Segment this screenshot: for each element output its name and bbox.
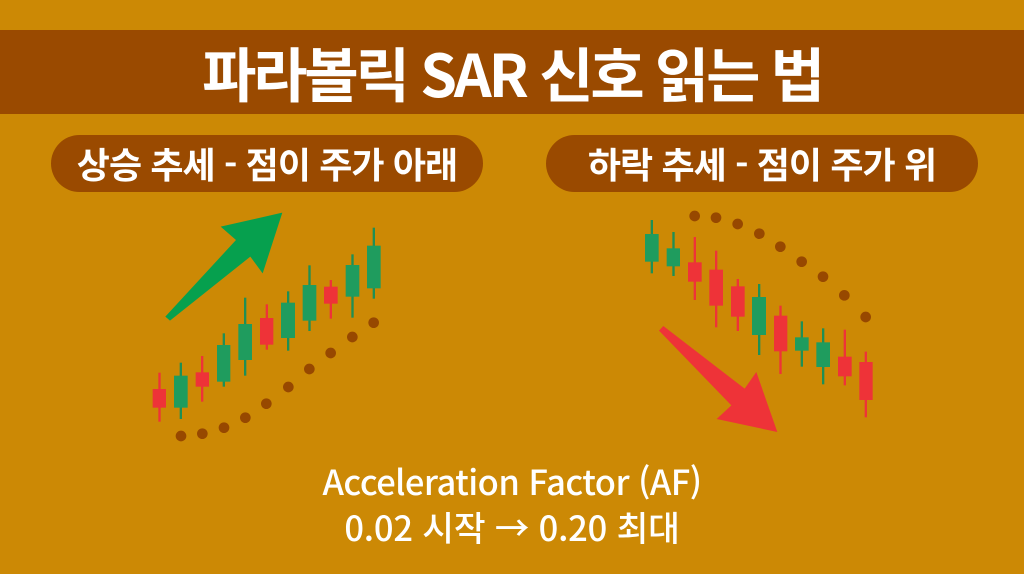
candlesticks: uptrend: [153, 228, 381, 422]
arrow: red down: [659, 326, 777, 432]
candlesticks: downtrend: [645, 220, 873, 417]
caption: acceleration factor: [322, 455, 701, 551]
title banner: 파라볼릭 SAR 신호 읽는 법: [202, 29, 822, 114]
SAR dots: below price: [176, 317, 379, 441]
downtrend chart: [645, 210, 873, 432]
caption: acceleration factor: Acceleration Factor (AF): [323, 455, 701, 505]
title banner: [0, 30, 1024, 114]
pill: downtrend label: 하락 추세 - 점이 주가 위: [588, 137, 936, 189]
caption: acceleration factor: 0.02 시작 → 0.20 최대: [344, 501, 680, 551]
arrow: green up: [165, 213, 282, 321]
uptrend chart: [152, 212, 381, 442]
SAR dots: above price: [689, 211, 871, 322]
pill: uptrend label: 상승 추세 - 점이 주가 아래: [77, 137, 457, 189]
